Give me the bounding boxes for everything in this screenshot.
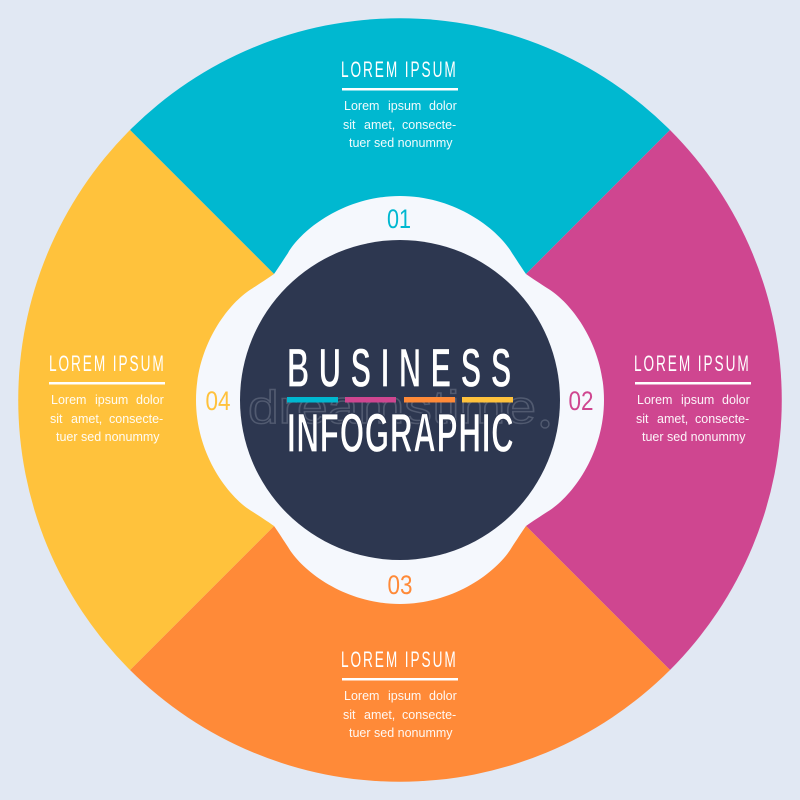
body copy: Lorem [637, 393, 672, 407]
number 01: 01 [387, 204, 411, 234]
body copy: sit [636, 412, 649, 426]
body copy: consecte- [402, 118, 456, 132]
title: BUSINESS: BUSINESS [287, 336, 511, 399]
rule [49, 382, 165, 384]
segment 04: yellow [18, 130, 400, 670]
body copy: tuer sed nonummy [56, 430, 160, 444]
body copy: sit [343, 708, 356, 722]
body copy: ipsum [681, 393, 714, 407]
body copy: amet, [71, 412, 102, 426]
number 03: 03 [388, 570, 412, 600]
body copy: consecte- [695, 412, 749, 426]
central four-lobed shape [196, 196, 604, 604]
text block: left panel [49, 351, 165, 444]
body copy: sit [50, 412, 63, 426]
title: INFOGRAPHIC: INFOGRAPHIC [287, 401, 514, 464]
text block: top panel [341, 57, 458, 150]
body copy: sit [343, 118, 356, 132]
segment 02: magenta [400, 130, 782, 670]
body copy: Lorem [51, 393, 86, 407]
body copy: Lorem [344, 99, 379, 113]
rule [342, 88, 458, 90]
body copy: ipsum [388, 99, 421, 113]
rule [342, 678, 458, 680]
segment 01: teal [130, 18, 670, 400]
heading: LOREM IPSUM [341, 647, 456, 672]
rule [635, 382, 751, 384]
body copy: amet, [364, 118, 395, 132]
body copy: amet, [364, 708, 395, 722]
heading: LOREM IPSUM [341, 57, 456, 82]
heading: LOREM IPSUM [49, 351, 164, 376]
number 02: 02 [568, 386, 594, 416]
body copy: dolor [429, 99, 457, 113]
text block: bottom panel [341, 647, 458, 740]
central dark circle [240, 240, 560, 560]
watermark: dreamstime [248, 381, 536, 433]
body copy: dolor [722, 393, 750, 407]
body copy: ipsum [388, 689, 421, 703]
body copy: amet, [657, 412, 688, 426]
number 04: 04 [206, 386, 230, 416]
body copy: tuer sed nonummy [642, 430, 746, 444]
body copy: dolor [136, 393, 164, 407]
heading: LOREM IPSUM [634, 351, 749, 376]
body copy: Lorem [344, 689, 379, 703]
body copy: ipsum [95, 393, 128, 407]
text block: right panel [634, 351, 751, 444]
body copy: tuer sed nonummy [349, 136, 453, 150]
body copy: dolor [429, 689, 457, 703]
body copy: tuer sed nonummy [349, 726, 453, 740]
body copy: consecte- [109, 412, 163, 426]
body copy: consecte- [402, 708, 456, 722]
title colour bars [287, 397, 513, 402]
segment 03: orange [130, 400, 670, 782]
